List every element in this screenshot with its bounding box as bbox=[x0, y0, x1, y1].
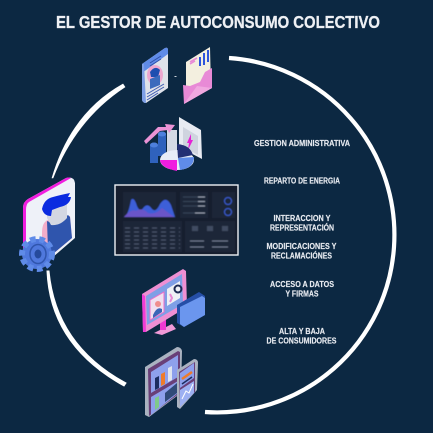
chart: area chart in dashboard bbox=[124, 199, 175, 217]
icon: manager profile card with gear bbox=[22, 178, 75, 269]
label: interaccion y representacion bbox=[270, 214, 334, 232]
text block: service list bbox=[254, 139, 350, 346]
arc: lower left tapered bbox=[47, 271, 126, 386]
label: modificaciones y reclamaciones bbox=[266, 242, 337, 260]
label: interaccion y representacion: INTERACCION Y bbox=[274, 214, 331, 223]
title: EL GESTOR DE AUTOCONSUMO COLECTIVO bbox=[56, 12, 380, 32]
icon: gear bbox=[22, 239, 52, 269]
label: acceso a datos y firmas bbox=[270, 280, 334, 298]
label: modificaciones y reclamaciones: MODIFICACIONES Y bbox=[266, 242, 337, 251]
icon: tablets with charts bbox=[145, 347, 198, 417]
icon: identity card bbox=[142, 48, 168, 103]
icon: monitor with folder bbox=[142, 269, 205, 335]
label: modificaciones y reclamaciones: RECLAMACIÓNES bbox=[271, 252, 332, 260]
icon: small dash between card and envelope bbox=[174, 76, 176, 77]
label: acceso a datos y firmas: ACCESO A DATOS bbox=[270, 280, 334, 289]
label: alta y baja de consumidores: DE CONSUMIDORES bbox=[266, 336, 336, 346]
label: alta y baja de consumidores bbox=[266, 327, 336, 346]
label: alta y baja de consumidores: ALTA Y BAJA bbox=[279, 327, 325, 336]
dashboard screenshot bbox=[115, 185, 238, 255]
icon: envelope with report bbox=[183, 47, 212, 104]
label: reparto de energia: REPARTO DE ENERGIA bbox=[264, 176, 340, 186]
icon: charts and pie bbox=[144, 117, 202, 171]
label: acceso a datos y firmas: Y FIRMAS bbox=[286, 290, 318, 298]
label: interaccion y representacion: REPRESENTACIÓN bbox=[270, 224, 334, 232]
label: gestion administrativa: GESTION ADMINISTRATIVA bbox=[254, 139, 350, 148]
arc: upper left tapered bbox=[52, 84, 125, 178]
arc: right cycle arrow bbox=[205, 58, 394, 412]
